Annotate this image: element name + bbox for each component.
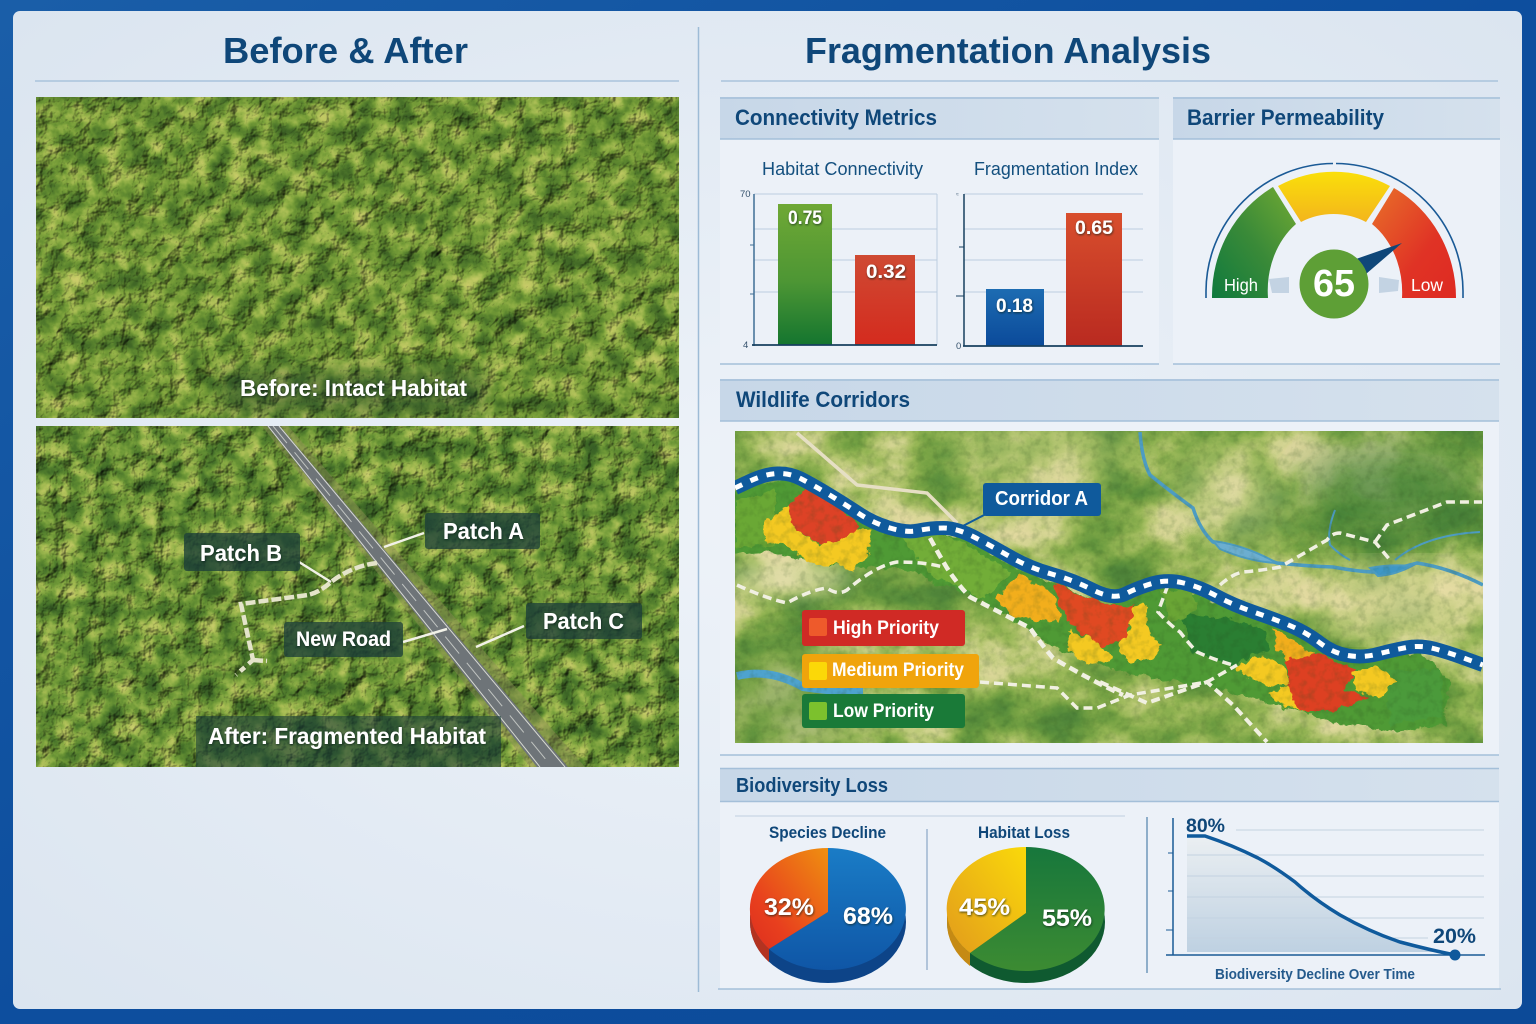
- callout: new road: New Road: [296, 628, 391, 651]
- gauge: [1206, 164, 1463, 318]
- pie chart: habitat loss: 45%: [959, 894, 1010, 921]
- bar chart: habitat connectivity: 4: [743, 340, 748, 351]
- callout: patch b: Patch B: [200, 540, 282, 566]
- gauge: Low: [1411, 275, 1443, 295]
- bar chart: fragmentation index: 0.18: [996, 296, 1033, 317]
- callout: corridor a: Corridor A: [995, 488, 1088, 510]
- callout: corridor a: [961, 483, 1101, 527]
- legend: low priority: [802, 694, 965, 728]
- line chart: biodiversity decline: 80%: [1186, 816, 1225, 837]
- photo: fragmented forest: [36, 426, 679, 767]
- priority patches: [765, 487, 1396, 713]
- callout: patch a: Patch A: [443, 518, 524, 544]
- road: [262, 426, 585, 767]
- main corridor: [735, 473, 1483, 665]
- panel: barrier permeability: [1173, 97, 1500, 364]
- heading: before and after: Before & After: [223, 30, 468, 71]
- gauge value: [1300, 250, 1368, 318]
- callout: patch a: [384, 513, 540, 549]
- bar chart: fragmentation index: 0: [956, 341, 961, 352]
- map: [720, 426, 1483, 750]
- line chart: biodiversity decline: [1166, 816, 1485, 983]
- label: fragmented: [196, 716, 501, 767]
- callout: patch c: Patch C: [543, 608, 624, 634]
- gauge value: 65: [1313, 263, 1355, 305]
- bar chart: fragmentation index: ≈: [956, 192, 959, 198]
- panel heading: Biodiversity Loss: [736, 775, 888, 797]
- callout: patch b: [184, 533, 331, 582]
- pie chart: species decline: 68%: [843, 903, 893, 930]
- left column: before and after: [35, 30, 679, 767]
- heading: fragmentation analysis: Fragmentation Analysis: [805, 30, 1211, 71]
- panel: wildlife corridors: [720, 379, 1499, 755]
- label: before: Before: Intact Habitat: [240, 375, 467, 401]
- callout: patch c: [476, 603, 642, 647]
- bar chart: habitat connectivity: 0.75: [788, 208, 822, 229]
- legend: high priority: [802, 610, 965, 646]
- legend: low priority: Low Priority: [833, 701, 934, 722]
- legend: [802, 610, 979, 728]
- bar chart: habitat connectivity: 70: [740, 189, 751, 200]
- center divider: [698, 27, 700, 992]
- pie chart: species decline: [750, 824, 906, 983]
- pie chart: habitat loss: Habitat Loss: [978, 824, 1070, 842]
- bar chart: habitat connectivity: [740, 159, 937, 351]
- label: fragmented: After: Fragmented Habitat: [208, 723, 486, 749]
- bar chart: fragmentation index: [956, 159, 1143, 352]
- green habitat band: [730, 478, 1450, 732]
- bar chart: fragmentation index: 0.65: [1075, 218, 1113, 239]
- dashed side corridors: [737, 502, 1482, 742]
- panel heading: Connectivity Metrics: [735, 105, 937, 130]
- pie chart: habitat loss: 55%: [1042, 905, 1092, 932]
- panel: biodiversity loss: [718, 768, 1501, 989]
- dashed fragment boundary: [236, 563, 377, 675]
- panel heading: Wildlife Corridors: [736, 387, 910, 412]
- panel: connectivity metrics: [720, 97, 1159, 364]
- pie chart: species decline: 32%: [764, 894, 814, 921]
- label: before: [222, 372, 484, 412]
- pie chart: habitat loss: [947, 824, 1105, 983]
- needle: [1356, 243, 1402, 274]
- bar chart: habitat connectivity: Habitat Connectivity: [762, 159, 923, 179]
- bar chart: fragmentation index: Fragmentation Index: [974, 159, 1138, 179]
- tan track: [797, 433, 957, 523]
- callout: new road: [284, 622, 447, 657]
- photo: intact forest: [36, 97, 679, 418]
- line chart: biodiversity decline: 20%: [1433, 925, 1476, 948]
- pie chart: species decline: Species Decline: [769, 824, 886, 842]
- legend: medium priority: Medium Priority: [832, 660, 964, 681]
- line chart: biodiversity decline: Biodiversity Decline Over Time: [1215, 967, 1415, 983]
- legend: medium priority: [802, 654, 979, 688]
- panel heading: Barrier Permeability: [1187, 105, 1385, 130]
- rivers: [737, 432, 1483, 692]
- legend: high priority: High Priority: [833, 618, 939, 639]
- gauge: High: [1224, 275, 1258, 295]
- bar chart: habitat connectivity: 0.32: [866, 262, 906, 283]
